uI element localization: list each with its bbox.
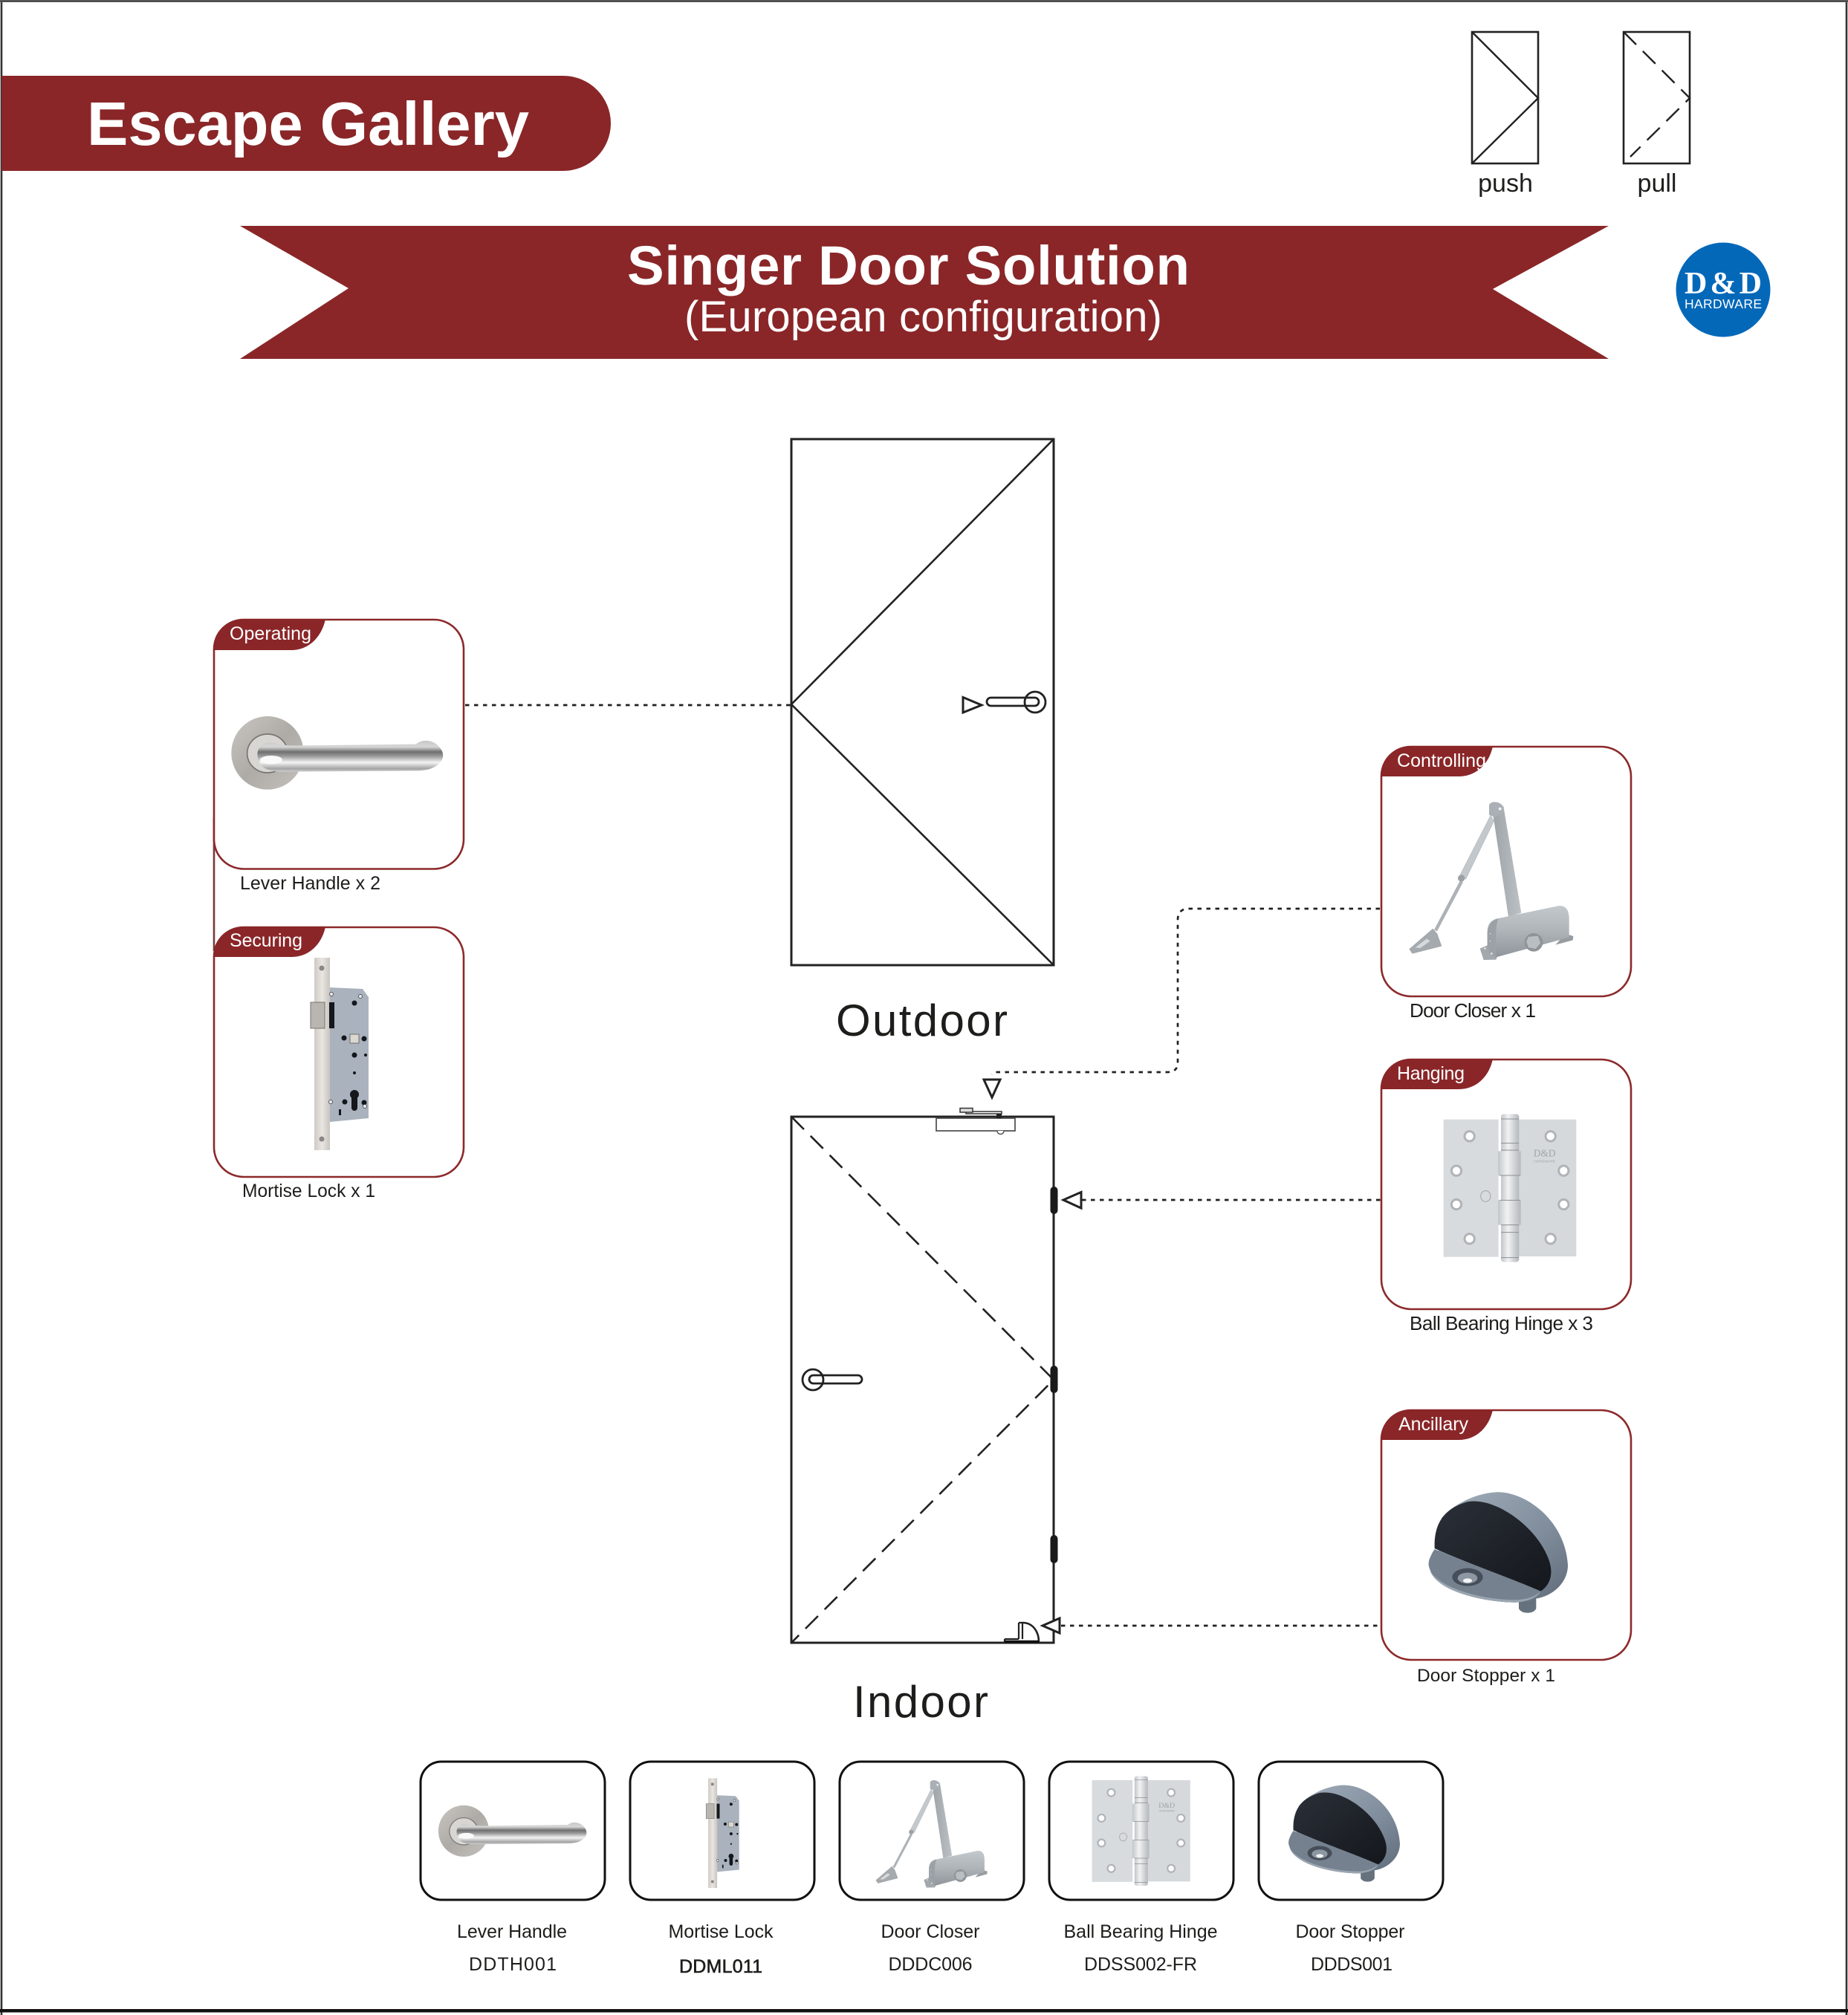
product list: hinge: [1064, 1921, 1217, 1975]
door stopper symbol: [1005, 1623, 1039, 1642]
photo: lever handle: [231, 716, 443, 790]
tab: [1381, 1059, 1493, 1089]
legend: push door: [1472, 32, 1538, 198]
pull label: pull: [1638, 169, 1676, 198]
photo: ball bearing hinge: [1444, 1114, 1576, 1262]
push label: push: [1478, 169, 1533, 198]
tab label: Ancillary: [1398, 1414, 1468, 1435]
product list: door closer: DDDC006: [889, 1954, 972, 1975]
product thumbnail: lever handle: [421, 1762, 605, 1900]
arrow: door stopper: [1043, 1618, 1060, 1633]
tab label: Hanging: [1397, 1063, 1465, 1084]
product thumbnail: door closer: [840, 1762, 1024, 1900]
caption: door stopper: Door Stopper x 1: [1417, 1666, 1555, 1686]
photo: door stopper: [1429, 1492, 1568, 1613]
door diagram: outdoor: [791, 439, 1054, 965]
tab label: Controlling: [1397, 750, 1486, 771]
title ribbon: [240, 226, 1609, 359]
product list: door stopper: DDDS001: [1311, 1954, 1393, 1975]
door diagram: indoor: [791, 1109, 1058, 1643]
hinge symbol 2: [1051, 1366, 1058, 1393]
logo: D&D Hardware: D&D: [1685, 267, 1762, 301]
connector: lever handle to outdoor door: [465, 704, 963, 706]
panel: Controlling: [1381, 746, 1631, 996]
tab label: Securing: [230, 930, 302, 951]
tab: [1381, 746, 1493, 776]
product list: door closer: Door Closer: [881, 1921, 979, 1942]
product thumbnail: hinge: [1049, 1762, 1233, 1900]
tab: [1381, 1409, 1493, 1440]
arrow: door closer: [984, 1080, 1000, 1097]
caption: door closer: Door Closer x 1: [1410, 999, 1536, 1022]
product list: mortise lock: Mortise Lock: [669, 1921, 774, 1942]
subtitle: (European configuration): [684, 293, 1162, 341]
product list: mortise lock: DDML011: [679, 1956, 762, 1977]
heading banner: Escape Gallery: [1, 76, 611, 171]
product list: door stopper: Door Stopper: [1296, 1921, 1404, 1942]
product list: door stopper: [1296, 1921, 1404, 1975]
heading text: Escape Gallery: [87, 89, 529, 158]
panel: Operating: [213, 619, 464, 869]
label: Outdoor: Outdoor: [836, 996, 1008, 1045]
product thumbnail: mortise lock: [630, 1762, 814, 1900]
product thumbnail: door stopper: [1259, 1762, 1443, 1900]
panel: Ancillary: [1381, 1409, 1631, 1660]
handle symbol: [803, 1369, 862, 1390]
tab label: Operating: [230, 623, 311, 644]
caption: mortise lock: Mortise Lock x 1: [242, 1181, 375, 1201]
hinge symbol 1: [1051, 1187, 1058, 1214]
arrow: [963, 697, 982, 713]
connector: door closer to indoor door: [992, 909, 1380, 1074]
product list: lever handle: Lever Handle: [457, 1921, 567, 1942]
caption: lever handle: Lever Handle x 2: [240, 873, 380, 894]
tab: [213, 927, 325, 957]
door closer symbol: [936, 1109, 1015, 1134]
panel: Hanging: [1381, 1059, 1631, 1309]
connector: door stopper to indoor door: [1061, 1625, 1381, 1626]
arrow: hinge: [1063, 1192, 1081, 1208]
photo: mortise lock: [311, 958, 369, 1150]
legend: pull door: [1624, 32, 1690, 198]
product list: lever handle: [457, 1921, 567, 1975]
tab: [213, 619, 325, 650]
title: Singer Door Solution: [627, 235, 1190, 296]
panel: Securing: [213, 927, 464, 1177]
link between left cards: [213, 817, 215, 951]
product list: lever handle: DDTH001: [469, 1954, 557, 1975]
label: Indoor: Indoor: [853, 1677, 988, 1727]
product list: door closer: [881, 1921, 979, 1975]
product list: mortise lock: [669, 1921, 774, 1977]
logo: D&D Hardware: HARDWARE: [1685, 296, 1762, 311]
product list: hinge: DDSS002-FR: [1084, 1954, 1197, 1975]
photo: door closer: [1410, 802, 1573, 960]
caption: hinge: Ball Bearing Hinge x 3: [1410, 1312, 1593, 1334]
connector: hinge to indoor door: [1082, 1199, 1381, 1201]
product list: hinge: Ball Bearing Hinge: [1064, 1921, 1217, 1942]
hinge symbol 3: [1051, 1535, 1058, 1563]
logo: D&D Hardware: [1676, 242, 1770, 337]
handle symbol: [987, 692, 1045, 713]
